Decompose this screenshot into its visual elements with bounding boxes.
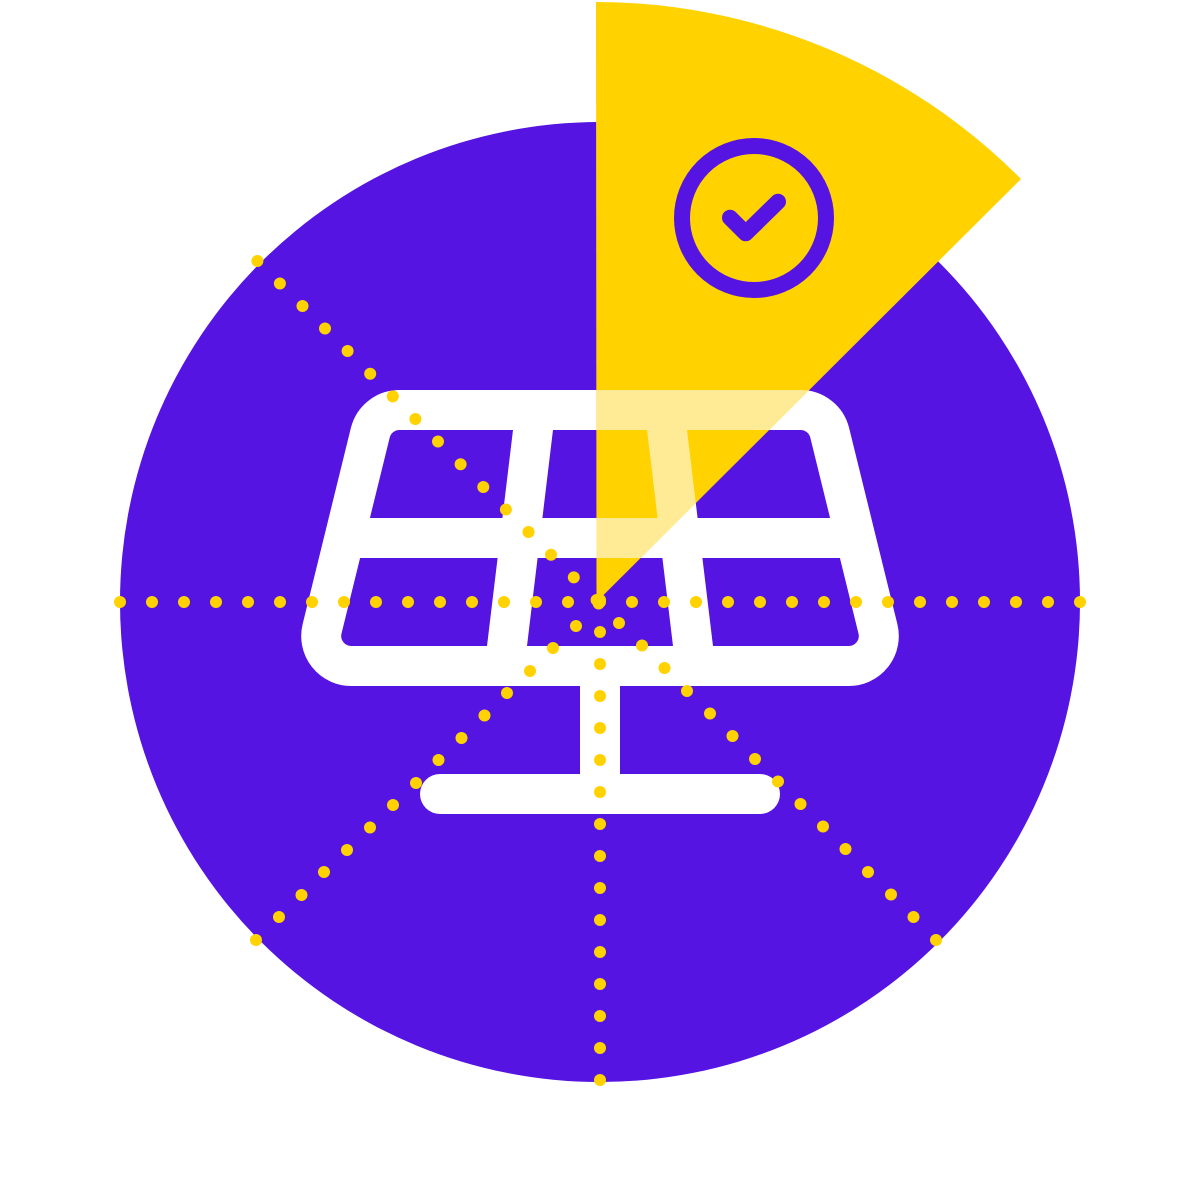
upper-left dotted ray <box>251 255 603 606</box>
panel overlap highlight on sector <box>596 390 808 558</box>
yellow sector <box>596 2 1021 602</box>
purple circle background <box>120 122 1080 1082</box>
horizontal dotted ray <box>114 596 1086 608</box>
solar panel infographic <box>114 2 1086 1086</box>
vertical dotted ray <box>594 594 606 1086</box>
icon: check badge <box>682 146 826 290</box>
dotted rays <box>114 255 1086 1086</box>
lower-right dotted ray <box>613 617 942 946</box>
lower-left dotted ray <box>250 598 605 946</box>
icon: solar panel <box>321 410 879 814</box>
